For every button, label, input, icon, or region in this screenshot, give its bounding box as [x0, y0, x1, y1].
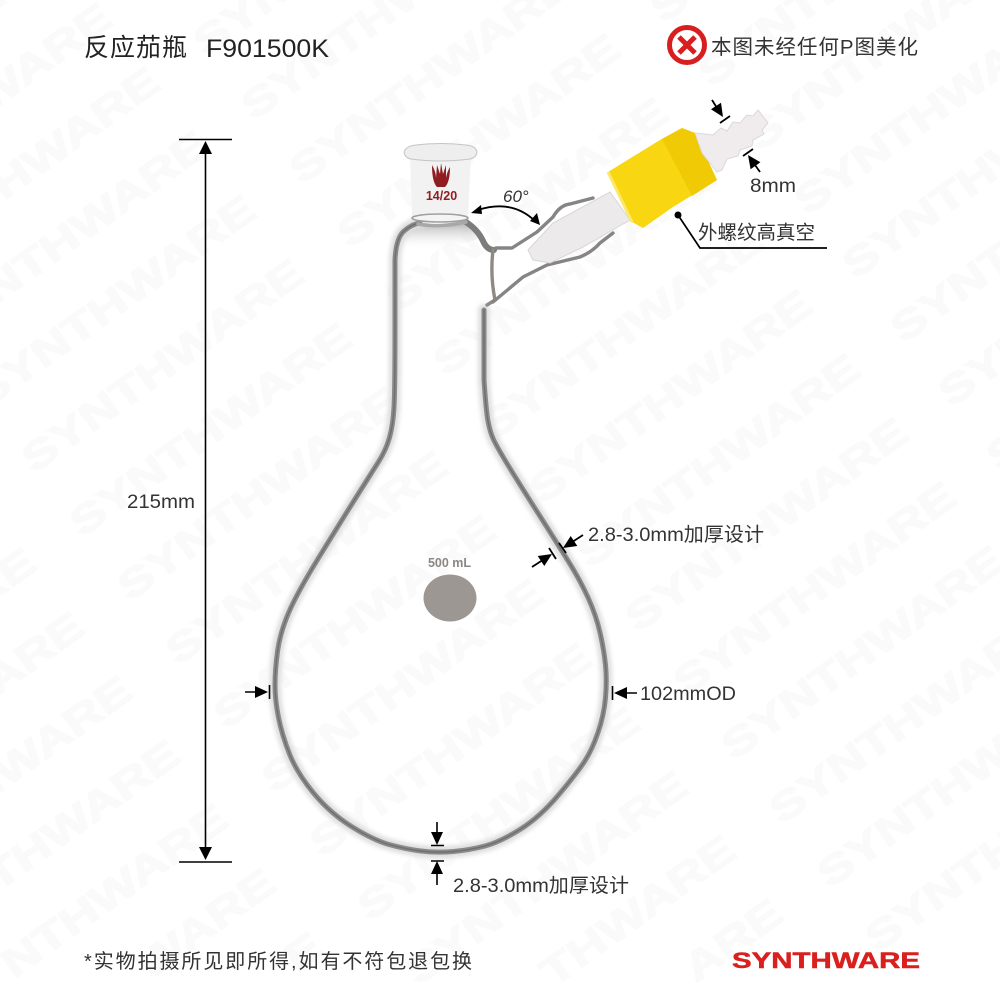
icon: maker logo on joint: [432, 163, 450, 187]
background watermark pattern: SYNTHWARE: [158, 443, 456, 673]
background watermark pattern: SYNTHWARE: [378, 90, 676, 320]
background watermark pattern: SYNTHWARE: [62, 315, 360, 545]
flask illustration: [275, 110, 768, 852]
angle annotation 60 degrees: [471, 187, 540, 225]
ground glass joint: [404, 144, 477, 222]
ground glass joint: 14/20: [426, 189, 457, 203]
diameter dimension: [245, 683, 736, 705]
hose barb size callout: [711, 100, 796, 197]
height dimension: [127, 140, 232, 862]
frosted marking disc: [424, 574, 476, 622]
title: [84, 34, 329, 63]
background watermark pattern: SYNTHWARE: [206, 507, 504, 737]
flask body glass wall: [275, 222, 606, 852]
frosted stopcock barrel: [528, 192, 630, 263]
background watermark pattern: SYNTHWARE: [522, 282, 820, 512]
angle annotation 60 degrees: 60°: [503, 187, 529, 206]
background watermark pattern: SYNTHWARE: [350, 699, 648, 929]
background watermark pattern: SYNTHWARE: [618, 410, 916, 640]
side arm glass tubes: [493, 198, 613, 302]
wall thickness callout: base: 2.8-3.0mm加厚设计: [453, 875, 629, 897]
background watermark pattern: SYNTHWARE: [398, 763, 696, 993]
footer note: *实物拍摄所见即所得,如有不符包退包换: [84, 950, 472, 973]
height dimension: 215mm: [127, 491, 195, 513]
yellow screw cap: [608, 128, 717, 228]
background watermark pattern: SYNTHWARE: [714, 538, 1000, 768]
background watermark pattern: SYNTHWARE: [254, 571, 552, 801]
diameter dimension: 102mmOD: [640, 683, 736, 705]
title: F901500K: [206, 35, 329, 63]
shoulder glass shading: [400, 224, 482, 250]
wall thickness callout: shoulder: 2.8-3.0mm加厚设计: [588, 524, 764, 546]
icon: red cross in circle: [670, 28, 704, 62]
white hose barb: [695, 110, 768, 172]
background watermark pattern: SYNTHWARE: [14, 251, 312, 481]
background watermark pattern: SYNTHWARE: [330, 26, 628, 256]
callout: external thread high vacuum: [674, 212, 827, 248]
background watermark pattern: SYNTHWARE: [426, 154, 724, 384]
callout: external thread high vacuum: 外螺纹高真空: [698, 222, 815, 244]
brand logo: SYNTHWARE: [732, 948, 920, 973]
capacity label: 500 mL: [428, 556, 471, 570]
wall thickness callout: base: [431, 822, 629, 897]
background watermark pattern: SYNTHWARE: [666, 474, 964, 704]
notice: not retouched: [670, 28, 918, 62]
background watermark pattern: SYNTHWARE: [302, 635, 600, 865]
background watermark pattern: E: [277, 924, 331, 980]
background watermark pattern: ARE: [676, 891, 791, 990]
background watermark pattern: THWARE: [533, 827, 744, 995]
notice: not retouched: 本图未经任何P图美化: [711, 36, 918, 59]
background watermark pattern: SYNTHWARE: [762, 602, 1000, 832]
background watermark pattern: SYNTHWARE: [282, 0, 580, 192]
background watermark pattern: WARE: [129, 860, 284, 988]
background watermark pattern: SYNTHWARE: [570, 346, 868, 576]
background watermark pattern: SYNTHWARE: [110, 379, 408, 609]
hose barb size callout: 8mm: [750, 175, 796, 197]
title: 反应茄瓶: [84, 34, 188, 62]
background watermark pattern: SYNTHWARE: [474, 218, 772, 448]
wall thickness callout: shoulder: [532, 524, 764, 567]
